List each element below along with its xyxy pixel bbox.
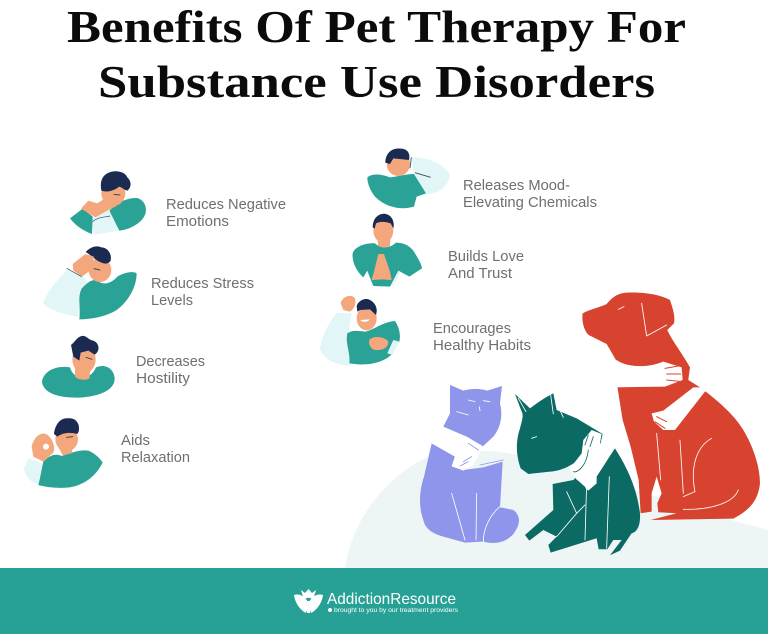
icon: man with praying hands bbox=[353, 214, 422, 287]
benefit: reduces negative emotions bbox=[70, 171, 286, 235]
label: Relaxation bbox=[121, 450, 190, 466]
title: Substance Use Disorders bbox=[98, 56, 655, 107]
label: Hostility bbox=[136, 371, 191, 387]
label: Reduces Stress bbox=[151, 276, 254, 292]
benefit: releases mood-elevating chemicals bbox=[367, 148, 597, 211]
arm and hands bbox=[432, 437, 483, 471]
label: Reduces Negative bbox=[166, 197, 286, 213]
icon: man touching forehead bbox=[43, 246, 137, 319]
label bbox=[151, 276, 254, 309]
arm and hands bbox=[570, 430, 616, 491]
arm around neck bbox=[597, 360, 683, 387]
icon: man flexing bbox=[320, 296, 400, 365]
icon: man with hand behind head bbox=[367, 148, 450, 208]
label bbox=[463, 178, 597, 211]
label bbox=[121, 433, 190, 466]
logo bbox=[294, 589, 459, 614]
label: Aids bbox=[121, 433, 150, 449]
benefit: aids relaxation bbox=[24, 418, 190, 488]
background mound bbox=[345, 451, 768, 568]
red dog bbox=[582, 292, 760, 520]
label: Builds Love bbox=[448, 249, 524, 265]
label: Emotions bbox=[166, 214, 229, 230]
wordmark: AddictionResource bbox=[327, 591, 456, 608]
icon: logo tulip bbox=[294, 589, 323, 613]
label: Decreases bbox=[136, 354, 205, 370]
arm around body bbox=[652, 387, 708, 430]
icon: man holding shoulder bbox=[70, 171, 146, 235]
label: Healthy Habits bbox=[433, 338, 531, 354]
label: Encourages bbox=[433, 321, 511, 337]
benefit: builds love and trust bbox=[353, 214, 524, 287]
benefit: encourages healthy habits bbox=[320, 296, 531, 365]
footer band bbox=[0, 568, 768, 634]
icon: man with ok gesture bbox=[24, 418, 103, 488]
label bbox=[448, 249, 524, 282]
illustration: pets being hugged bbox=[420, 292, 760, 555]
label: Elevating Chemicals bbox=[463, 195, 597, 211]
label bbox=[136, 354, 205, 387]
label: Releases Mood- bbox=[463, 178, 570, 194]
icon: man frowning bbox=[42, 336, 115, 398]
green dog bbox=[515, 393, 640, 555]
purple cat bbox=[420, 385, 519, 543]
tagline: brought to you by our treatment providers bbox=[334, 607, 459, 614]
label bbox=[166, 197, 286, 230]
label bbox=[433, 321, 531, 354]
label: Levels bbox=[151, 293, 193, 309]
title bbox=[67, 1, 686, 107]
title: Benefits Of Pet Therapy For bbox=[67, 1, 686, 52]
label: And Trust bbox=[448, 266, 512, 282]
benefit: reduces stress levels bbox=[43, 246, 254, 319]
benefit: decreases hostility bbox=[42, 336, 205, 398]
